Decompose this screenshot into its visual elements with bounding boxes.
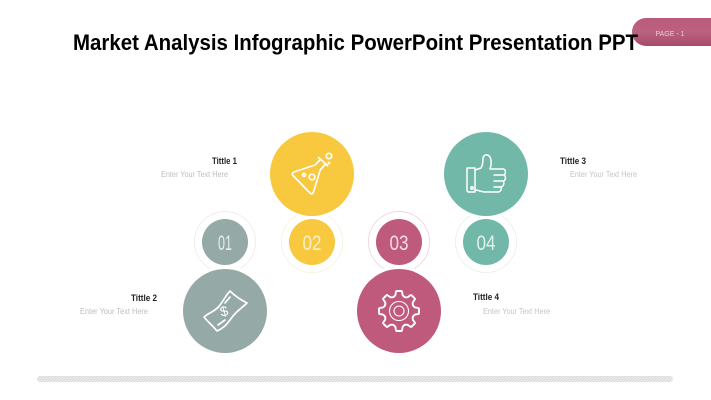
yellow circle with flask icon [267,129,357,219]
page tab [632,18,711,46]
grey circle with banknote icon [180,266,270,356]
number badge 02 [282,212,342,272]
text block: title 2: Enter Your Text Here [80,307,148,316]
text block: title 3 [560,156,637,179]
text block: title 3: Tittle 3 [560,156,586,166]
teal circle with thumbs-up icon [441,129,531,219]
text block: title 1 [161,156,237,179]
number badge 04 [456,212,516,272]
hatched bottom bar [37,376,673,382]
text block: title 4 [473,292,550,316]
text block: title 1: Enter Your Text Here [161,170,228,179]
number badge 02: 02 [302,232,322,255]
pink circle with gear icon [354,266,444,356]
number badge 04: 04 [476,232,496,255]
title: Market Analysis Infographic PowerPoint Presentation PPT [73,30,639,55]
page tab: PAGE - 1 [656,29,684,38]
icon: gear [379,291,419,331]
text block: title 4: Tittle 4 [473,292,499,302]
text block: title 2 [80,293,157,316]
text block: title 3: Enter Your Text Here [570,170,637,179]
icon: flask [292,153,332,194]
text block: title 4: Enter Your Text Here [483,307,550,316]
number badge 03 [368,212,430,272]
number badge 03: 03 [390,232,408,255]
text block: title 2: Tittle 2 [131,293,157,303]
icon: thumbs up [467,155,505,192]
number badge 01: 01 [218,232,232,255]
text block: title 1: Tittle 1 [212,156,237,166]
icon: banknote: $ [218,302,230,320]
number badge 01 [194,212,256,272]
